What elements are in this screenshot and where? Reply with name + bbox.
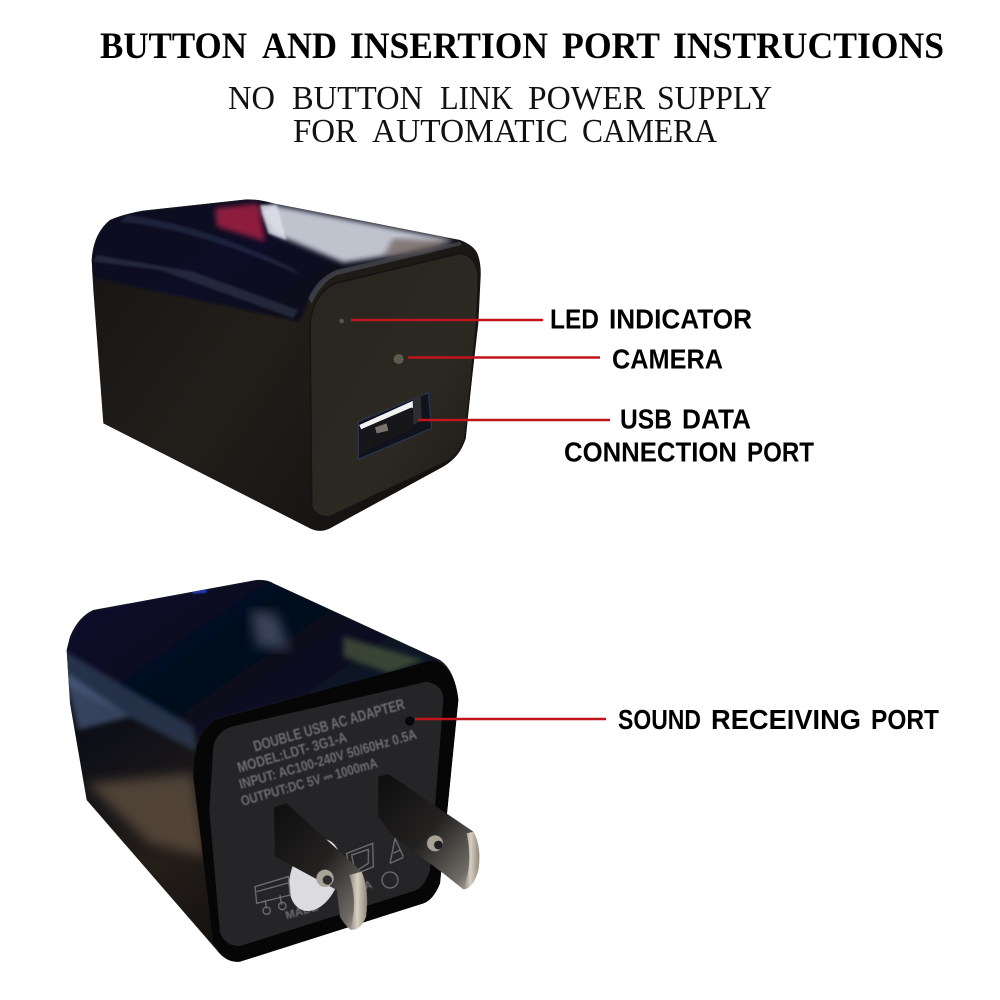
sound receiving hole: [405, 716, 414, 726]
printed label text: DOUBLE USB AC ADAPTER: [251, 696, 407, 756]
callout labels: INDICATOR: [609, 304, 752, 334]
callout labels: PORT: [871, 704, 939, 735]
hologram sticker: [280, 832, 350, 918]
camera lens: [394, 354, 404, 364]
printed label text: OUTPUT:DC 5V ⎓ 1000mA: [239, 754, 379, 809]
callout labels: [550, 304, 939, 735]
USB port: [358, 393, 432, 459]
callout labels: CONNECTION: [564, 436, 737, 468]
photo: charger rear view with plug: [63, 580, 479, 962]
title: [100, 26, 944, 67]
subtitle: LINK: [440, 80, 513, 117]
subtitle: BUTTON: [292, 80, 423, 117]
subtitle: [228, 80, 772, 150]
rear plate: [209, 682, 443, 946]
title: AND: [262, 26, 337, 67]
printed label text: [236, 696, 418, 922]
subtitle: FOR: [293, 113, 358, 150]
subtitle: SUPPLY: [657, 80, 772, 117]
right prong: [378, 774, 479, 889]
printed label text: MODEL:LDT- 3G1-A: [236, 730, 349, 777]
callout labels: PORT: [747, 436, 814, 468]
title: BUTTON: [100, 26, 247, 67]
printed label text: MADE: [284, 901, 320, 922]
left prong: [274, 803, 367, 930]
title: INSERTION: [350, 26, 548, 67]
photo: charger front view: [92, 199, 481, 531]
callout labels: RECEIVING: [711, 704, 861, 735]
front face: [310, 253, 478, 517]
subtitle: POWER: [528, 80, 646, 117]
LED dot: [339, 319, 344, 323]
callout labels: USB: [620, 404, 672, 434]
title: INSTRUCTIONS: [673, 26, 944, 67]
rear frame: [193, 660, 458, 962]
printed label text: INPUT: AC100-240V 50/60Hz 0.5A: [237, 726, 418, 792]
certification marks: [255, 838, 403, 914]
subtitle: NO: [228, 80, 275, 117]
callout labels: DATA: [682, 404, 751, 434]
callout labels: CAMERA: [612, 344, 723, 374]
printed label text: A: [363, 879, 374, 893]
leader lines: [351, 320, 610, 719]
subtitle: AUTOMATIC: [372, 113, 568, 150]
callout labels: SOUND: [618, 704, 701, 735]
title: PORT: [562, 26, 660, 67]
callout labels: LED: [550, 304, 599, 334]
subtitle: CAMERA: [582, 113, 717, 150]
